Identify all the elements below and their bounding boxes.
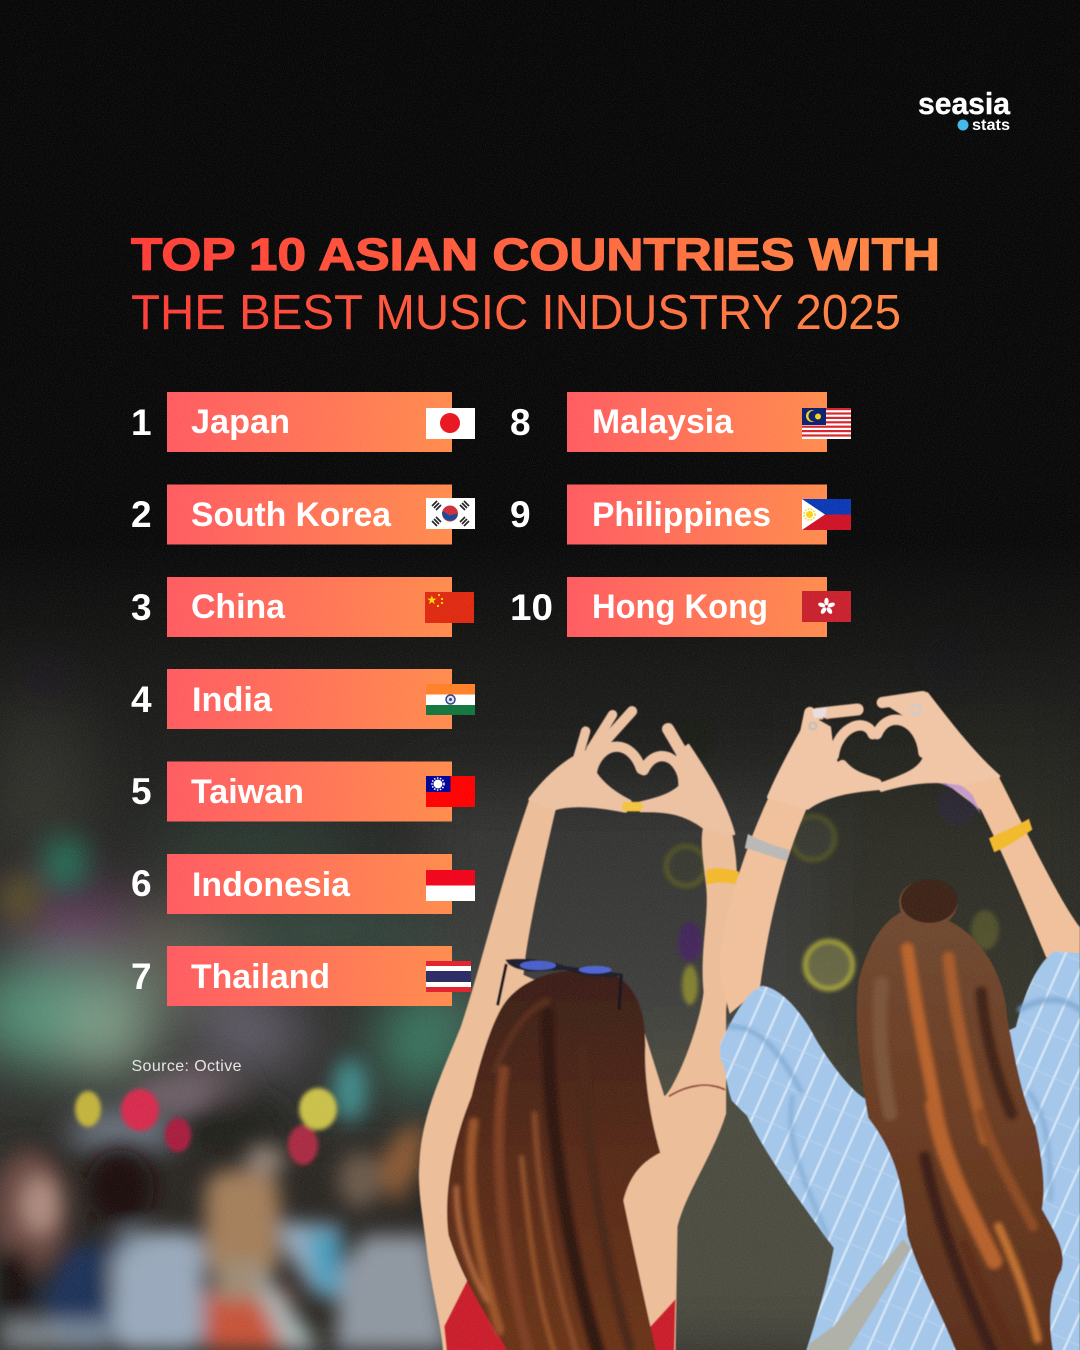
row 2 South Korea: 2	[131, 494, 152, 535]
left woman	[419, 711, 739, 1350]
left hand, heart shape	[530, 711, 734, 834]
row 4 India: India	[192, 681, 273, 719]
row 9 Philippines: Philippines	[592, 496, 771, 534]
row 5 Taiwan: 5	[131, 771, 152, 812]
logo: seasia stats: seasia	[918, 86, 1011, 121]
row 10 Hong Kong	[510, 577, 851, 637]
row 1 Japan: 1	[131, 402, 152, 443]
row 7 Thailand: 7	[131, 956, 152, 997]
photo: two women making heart hands	[419, 694, 1080, 1350]
row 9 Philippines	[510, 484, 851, 544]
row 5 Taiwan	[131, 762, 475, 822]
row 3 China: 3	[131, 587, 152, 628]
row 8 Malaysia	[510, 392, 851, 452]
row 6 Indonesia: 6	[131, 863, 152, 904]
left woman red top	[444, 1272, 675, 1350]
logo: seasia stats: stats	[972, 117, 1010, 134]
right woman shirt	[720, 951, 1080, 1350]
sunglasses	[498, 959, 623, 1010]
row 3 China: China	[191, 588, 286, 626]
source note: Source: Octive	[132, 1058, 242, 1075]
title: TOP 10 ASIAN COUNTRIES WITH	[131, 229, 940, 280]
right woman	[719, 694, 1080, 1350]
ranking list: left column	[131, 392, 475, 1006]
row 7 Thailand	[131, 946, 471, 1006]
row 1 Japan: Japan	[191, 403, 290, 441]
right woman arms	[719, 797, 808, 1014]
logo dot	[958, 120, 968, 130]
row 4 India: 4	[131, 679, 152, 720]
row 2 South Korea	[131, 484, 475, 544]
row 3 China	[131, 577, 474, 637]
ranking list: right column	[510, 392, 851, 637]
row 10 Hong Kong: Hong Kong	[592, 588, 768, 626]
row 2 South Korea: South Korea	[191, 496, 392, 534]
title: THE BEST MUSIC INDUSTRY 2025	[131, 286, 901, 340]
bag strap	[803, 1239, 911, 1350]
row 6 Indonesia: Indonesia	[192, 866, 351, 904]
row 8 Malaysia: Malaysia	[592, 403, 734, 441]
row 6 Indonesia	[131, 854, 475, 914]
row 8 Malaysia: 8	[510, 402, 531, 443]
yellow wristband left	[706, 868, 739, 885]
silver watch	[745, 834, 789, 861]
left woman hair	[447, 970, 660, 1350]
row 7 Thailand: Thailand	[191, 958, 330, 996]
row 5 Taiwan: Taiwan	[191, 773, 304, 811]
yellow wristband right	[989, 819, 1032, 852]
row 10 Hong Kong: 10	[510, 587, 553, 628]
right hands, heart shape	[769, 694, 998, 808]
row 9 Philippines: 9	[510, 494, 531, 535]
row 4 India	[131, 669, 475, 729]
row 1 Japan	[131, 392, 475, 452]
title	[131, 229, 940, 340]
row 3 China: ★	[426, 593, 437, 607]
right woman hair	[857, 879, 1063, 1350]
